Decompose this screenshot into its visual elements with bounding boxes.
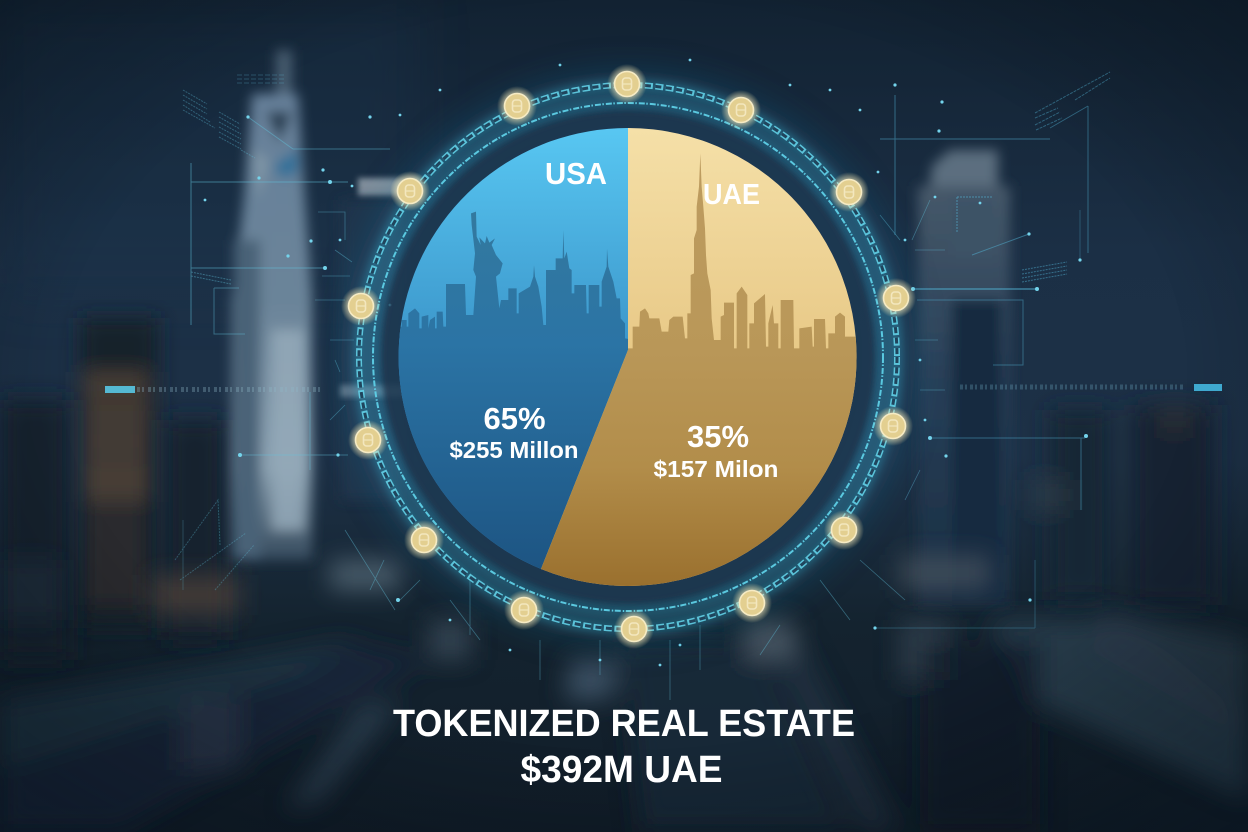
slice: UAE — [541, 128, 857, 586]
value: USA share: $255 Millon — [450, 437, 578, 463]
token coins around ring — [341, 64, 916, 649]
coin — [824, 510, 864, 550]
HUD data overlay: left side — [175, 75, 945, 700]
coin — [614, 609, 654, 649]
pie halo — [323, 52, 933, 662]
left tower — [232, 50, 312, 560]
label: USA: USA — [545, 156, 607, 191]
slice: USA — [398, 128, 628, 569]
value: USA share: 65% — [484, 401, 546, 436]
coin — [721, 90, 761, 130]
value: USA share — [450, 401, 578, 463]
pie chart — [390, 120, 868, 600]
coin — [341, 286, 381, 326]
coin — [732, 583, 772, 623]
HUD data strip: right — [960, 384, 1222, 391]
value: UAE share: 35% — [687, 419, 749, 454]
center-left building blur — [358, 178, 420, 196]
far right buildings — [1030, 405, 1214, 605]
coin — [829, 172, 869, 212]
title: $392M UAE — [520, 749, 722, 791]
right tower — [918, 150, 1010, 606]
coin — [607, 64, 647, 104]
distant lights band — [0, 555, 990, 620]
value: UAE share: $157 Milon — [654, 456, 778, 482]
coin — [404, 520, 444, 560]
title — [393, 703, 855, 791]
coin — [504, 590, 544, 630]
coin — [497, 86, 537, 126]
street — [0, 610, 1248, 832]
label: UAE: UAE — [703, 179, 760, 211]
inner dotted ring — [372, 101, 884, 613]
HUD dots — [204, 59, 1088, 666]
left dark building — [80, 318, 158, 628]
blockchain ring — [359, 85, 897, 629]
UAE skyline silhouette — [523, 153, 860, 597]
outer chain ring — [359, 85, 897, 629]
coin — [348, 420, 388, 460]
coin — [390, 171, 430, 211]
coin — [876, 278, 916, 318]
HUD data overlay: right side — [875, 72, 1110, 628]
title: TOKENIZED REAL ESTATE — [393, 703, 855, 745]
coin — [873, 406, 913, 446]
HUD data strip: left — [105, 386, 320, 393]
USA skyline silhouette — [398, 212, 628, 569]
value: UAE share — [654, 419, 778, 482]
